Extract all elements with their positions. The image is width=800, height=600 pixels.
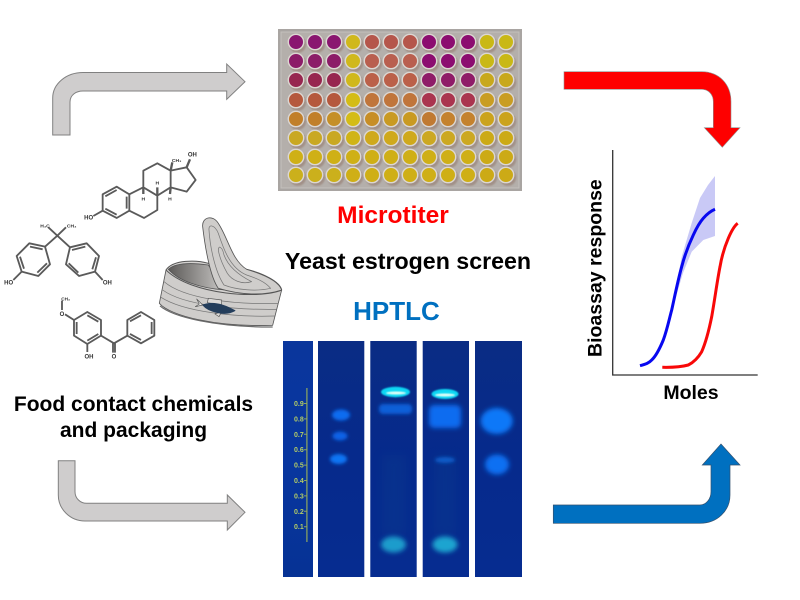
strip 3: bright band and spots — [370, 341, 417, 577]
molecule: estradiol: OH — [188, 152, 197, 158]
strip 4: bright band and spots — [423, 341, 469, 577]
microtiter plate photo — [278, 29, 522, 191]
blue response curve — [640, 209, 715, 366]
strip 1: Rf ruler: 0.2 — [294, 509, 304, 516]
can rim and interior — [166, 261, 282, 295]
can lid — [203, 218, 282, 294]
can body — [159, 270, 282, 326]
strip 5: two large spots — [475, 341, 522, 577]
arrow: grey, packaging to microtiter — [53, 64, 245, 135]
strip 1: Rf ruler: 0.6 — [294, 447, 304, 454]
HPTLC plate strips — [283, 341, 522, 577]
strip 1: Rf ruler: 0.7 — [294, 432, 304, 439]
molecule: oxybenzone: OH — [84, 355, 93, 361]
fish on can label — [195, 298, 235, 317]
arrow: red, microtiter to chart — [564, 72, 740, 147]
strip 1: Rf ruler: 0.4 — [294, 478, 304, 485]
strip 1: Rf ruler: 0.9 — [294, 401, 304, 408]
chart axes — [613, 150, 758, 375]
molecule: estradiol: H — [168, 196, 172, 202]
label: Food contact chemicals and packaging: Food contact chemicals — [14, 393, 253, 416]
x axis label: Moles — [663, 382, 719, 404]
heading: HPTLC: HPTLC — [353, 296, 440, 326]
red response curve — [662, 223, 738, 367]
label: Food contact chemicals and packaging — [14, 393, 253, 442]
molecule: bisphenol A: H₃C — [40, 224, 50, 230]
molecule: oxybenzone: O — [60, 312, 65, 318]
strip 1: Rf ruler: 0.8 — [294, 416, 304, 423]
blue confidence band — [671, 176, 715, 315]
molecule: estradiol: H — [142, 196, 146, 202]
molecule: estradiol — [84, 152, 197, 221]
strip 1: Rf ruler — [283, 341, 313, 577]
molecule: estradiol: H — [156, 180, 160, 186]
molecule: estradiol: CH₃ — [172, 158, 182, 164]
strip 1: Rf ruler: 0.1 — [294, 524, 304, 531]
molecule: bisphenol A: CH₃ — [67, 224, 77, 230]
molecule: oxybenzone: CH₃ — [61, 296, 70, 301]
strip 1: Rf ruler: 0.3 — [294, 493, 304, 500]
molecule: oxybenzone — [60, 296, 154, 361]
molecule: bisphenol A: OH — [103, 280, 112, 286]
chart: dose-response curves — [584, 150, 758, 404]
molecules, authored in 3x coordinates — [4, 152, 197, 361]
strip 1: Rf ruler: 0.5 — [294, 463, 304, 470]
molecule: bisphenol A — [4, 224, 112, 286]
arrow: grey, packaging to HPTLC — [58, 461, 245, 530]
y axis label: Bioassay response — [584, 179, 606, 357]
molecule: oxybenzone: O — [112, 354, 117, 360]
molecule: bisphenol A: HO — [4, 280, 13, 286]
heading: Yeast estrogen screen: Yeast estrogen screen — [285, 248, 531, 274]
strip 2: three spots — [318, 341, 364, 577]
label: Food contact chemicals and packaging: and packaging — [60, 419, 207, 442]
arrow: blue, HPTLC to chart — [553, 444, 740, 523]
heading: Microtiter: Microtiter — [337, 202, 449, 229]
icon: opened tin can with fish — [159, 218, 282, 327]
molecule: estradiol: HO — [84, 215, 93, 221]
